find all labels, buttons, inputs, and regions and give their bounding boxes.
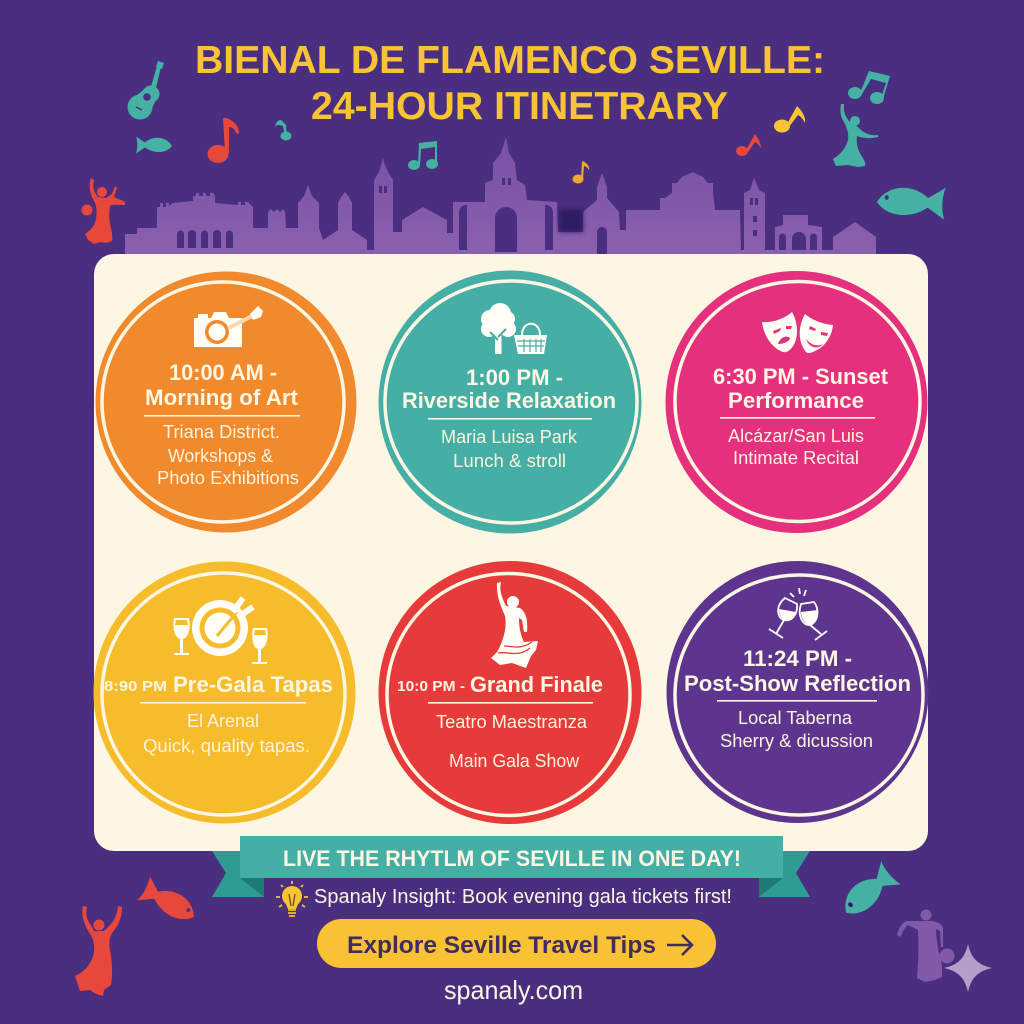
icon: teal fish right [876,184,946,220]
icon: red small note [736,134,761,156]
icon: teal dancer top right [833,104,878,167]
icon: red dancer top left [82,178,125,244]
panel: 8:30 PM pre-gala tapas: Quick, quality tapas. [143,736,310,756]
banner ribbon [212,836,810,897]
panel: 1:00 PM riverside relaxation: 1:00 PM - [466,365,563,390]
panel: 10:00 AM morning of art: Photo Exhibitions [157,468,299,488]
icon: arrow [667,935,692,955]
panel: 10:00 PM grand finale: Main Gala Show [449,751,580,771]
icon: teal fish bottom right [835,861,901,923]
icon: clinking wine glasses [769,588,827,640]
insight text: Spanaly Insight: Book evening gala tickets first! [314,886,732,908]
icon: flamenco dancer [491,582,538,668]
panel: 10:00 AM morning of art: Workshops & [168,446,273,466]
icon: tree and basket [481,303,547,354]
panel: 6:30 PM sunset performance: Performance [728,388,864,413]
panel: 11:24 PM post-show reflection [666,561,928,823]
panel: 11:24 PM post-show reflection: Post-Show Reflection [684,671,911,696]
panel: 10:00 PM grand finale [378,561,642,824]
icon: teal double note right [848,71,890,104]
panel: itinerary card [94,254,928,851]
panel: 10:00 PM grand finale: Grand Finale [470,672,603,697]
panel: 8:30 PM pre-gala tapas [94,562,356,824]
panel: 6:30 PM sunset performance: Intimate Recital [733,448,859,468]
title [195,39,825,128]
panel: 11:24 PM post-show reflection: 11:24 PM - [743,646,852,671]
call to action button [317,919,716,968]
icon: camera with guitar [194,306,263,347]
icon: sparkle star [944,944,992,992]
panel: 11:24 PM post-show reflection: Sherry & dicussion [720,731,873,751]
website: spanaly.com [444,975,583,1005]
title: BIENAL DE FLAMENCO SEVILLE: [195,39,825,82]
panel: 6:30 PM sunset performance: 6:30 PM - Sunset [713,364,889,389]
title: 24-HOUR ITINETRARY [311,85,728,128]
panel: 1:00 PM riverside relaxation: Riverside Relaxation [402,388,616,413]
icon: red dancer bottom left [75,906,122,996]
panel: 1:00 PM riverside relaxation: Maria Luisa Park [441,427,578,447]
icon: teal fish top left [136,137,172,153]
icon: guitar [128,61,164,120]
panel: 10:00 PM grand finale: 10:0 PM - [397,678,465,695]
icon: plate and wine glasses [173,598,268,664]
call to action button: Explore Seville Travel Tips [347,932,656,959]
icon: theatre masks [762,312,833,353]
icon: light bulb [276,881,308,916]
icon: red fish bottom left [137,876,201,928]
panel: 1:00 PM riverside relaxation: Lunch & stroll [453,451,566,471]
panel: 11:24 PM post-show reflection: Local Taberna [738,708,853,728]
panel: 10:00 AM morning of art [96,272,356,532]
panel: 8:30 PM pre-gala tapas: Pre-Gala Tapas [173,672,333,697]
icon: purple dancer bottom right [897,910,954,982]
panel: 10:00 AM morning of art: Morning of Art [145,385,299,410]
panel: 1:00 PM riverside relaxation [378,270,642,534]
panel: 8:30 PM pre-gala tapas: El Arenal [187,711,259,731]
icon: orange note [572,161,589,184]
icon: teal double note [408,141,438,170]
banner ribbon: LIVE THE RHYTLM OF SEVILLE IN ONE DAY! [283,846,741,871]
panel: 8:30 PM pre-gala tapas: 8:90 PM [104,678,167,695]
skyline of Seville [125,137,876,254]
panel: 10:00 PM grand finale: Teatro Maestranza [436,712,588,732]
icon: yellow note [774,106,805,132]
icon: red music note [208,118,239,163]
icon: small teal note [275,120,292,140]
panel: 6:30 PM sunset performance [666,271,928,533]
panel: 10:00 AM morning of art: 10:00 AM - [169,360,277,385]
panel: 6:30 PM sunset performance: Alcázar/San Luis [728,426,864,446]
panel: 10:00 AM morning of art: Triana District. [163,422,280,442]
